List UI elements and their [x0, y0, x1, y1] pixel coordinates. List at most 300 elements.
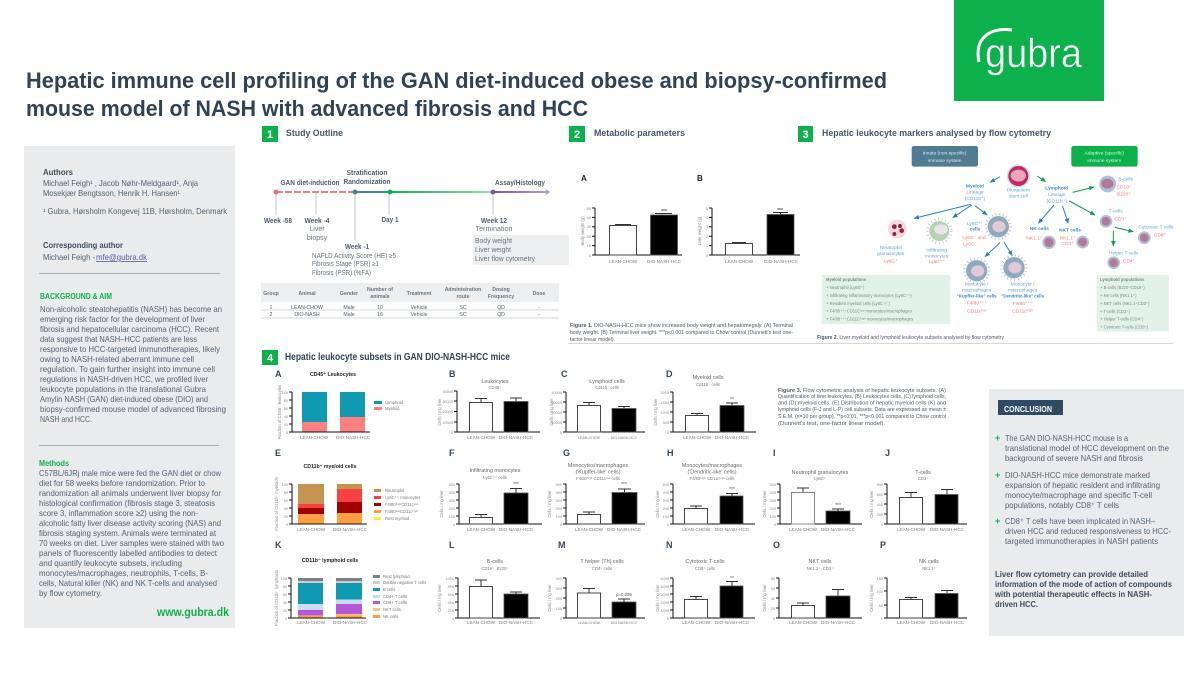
panel: authors, background and methods sidebar [24, 146, 235, 628]
termination readouts: Liver weight [475, 247, 511, 254]
chart: liver weight: DIO-NASH-HCC [764, 259, 799, 264]
chart G: Kupffer-like monocytes/macrophages: 200 [556, 507, 562, 511]
methods: cells, Natural killer (NK) and NK T-cells and analysed [39, 579, 217, 588]
chart A: CD45+ leukocytes stacked bars: Fraction of CD45⁺ leukocytes [277, 385, 282, 439]
chart A: CD45+ leukocytes stacked bars: Lymphoid [385, 400, 404, 405]
chart K: CD11b- lymphoid stacked bars: Double negative T cells [383, 580, 426, 585]
methods: and quantify leukocyte subsets, including [39, 559, 182, 568]
chart M: T helper cells: M [558, 540, 566, 550]
chart E: CD11b+ myeloid stacked bars: 80 [284, 491, 288, 495]
table: study groups: Dose [533, 291, 545, 297]
heading: section 1 study outline: Study Outline [286, 128, 343, 138]
chart M: T helper cells: Cells / mg liver [547, 584, 552, 612]
background and aim: data suggest that NASH–HCC patients are less [40, 335, 197, 344]
chart K: CD11b- lymphoid stacked bars: CD4+ T cells [383, 594, 407, 599]
chart H: dendritic-like monocytes/macrophages [655, 448, 755, 532]
chart B: leukocytes: B [449, 369, 456, 379]
conclusion statement [994, 570, 1172, 609]
chart G: Kupffer-like monocytes/macrophages: 500 [556, 483, 562, 487]
chart: body weight: 50 [587, 207, 591, 211]
chart C: lymphoid cells: Cells / mg liver [549, 398, 554, 426]
caption: figure 1: body weight. (B) Terminal liver weight. ***p<0.001 compared to Chow control (Dunnett's test one- [570, 330, 793, 336]
NKT cells: CD3⁺ [1062, 241, 1074, 247]
chart P: NK cells [869, 540, 967, 625]
resident macrophage: Ly6C⁻ [963, 242, 977, 248]
stem cell [1007, 164, 1031, 200]
chart: body weight: 40 [587, 216, 591, 220]
myeloid lineage label [965, 183, 986, 202]
NKT cells [1059, 228, 1089, 248]
stem cell: Pluripotent [1007, 187, 1031, 193]
cytotoxic T-cells [1138, 225, 1174, 244]
chart P: NK cells: 0 [881, 617, 883, 621]
chart O: NKT cells: 40 [771, 597, 775, 601]
chart: liver weight: 4 [706, 216, 708, 220]
chart D: myeloid cells: Cd11b⁺ cells [696, 382, 720, 387]
methods: diet for 58 weeks before randomization. Prior to [39, 479, 205, 488]
helper T-cells: Helper T cells [1109, 250, 1139, 256]
helper T-cells: CD4⁺ [1123, 258, 1136, 264]
chart F: infiltrating monocytes: *** [513, 482, 519, 488]
heading: section 2 metabolic parameters: 2 [574, 129, 580, 141]
title: mouse model of NASH with advanced fibrosis and HCC [26, 96, 588, 121]
table: study groups: Frequency [488, 294, 514, 300]
chart B: leukocytes: Leukocytes [481, 379, 509, 385]
logo: gubra [954, 0, 1104, 101]
stem cell: stem cell [1009, 194, 1028, 200]
myeloid lineage label: Lineage [966, 190, 984, 196]
B-cells: CD19⁺ [1117, 185, 1132, 191]
timeline: study outline: Fibrosis (PSR) (%FA) [312, 270, 371, 277]
conclusion point 1: The GAN DIO-NASH-HCC mouse is a [1005, 434, 1128, 443]
lymphoid lineage label [1045, 186, 1068, 204]
chart D: myeloid cells: 1000 [661, 411, 669, 415]
background and aim: biopsy-confirmed mouse model of advanced fibrosing [40, 405, 226, 414]
chart A: CD45+ leukocytes stacked bars: 0 [286, 431, 288, 435]
conclusion point 3 [995, 516, 1171, 546]
kupffer-like macrophage: F4/80⁺⁺⁺ [967, 301, 987, 307]
B-cells: B220⁺ [1117, 192, 1131, 198]
chart E: CD11b+ myeloid stacked bars: Neutrophil [385, 488, 404, 493]
lineage arrows [914, 176, 1133, 257]
chart F: infiltrating monocytes [439, 448, 542, 532]
chart J: T-cells: 800 [877, 483, 883, 487]
chart G: Kupffer-like monocytes/macrophages: 100 [556, 515, 562, 519]
chart F: infiltrating monocytes: 0 [453, 523, 455, 527]
background and aim: leukocyte populations in the translational Gubra [40, 385, 206, 394]
chart H: dendritic-like monocytes/macrophages: Cells / mg liver [655, 490, 660, 518]
lymphoid populations box: + NK cells (NK1.1⁺) [1100, 293, 1137, 298]
chart D: myeloid cells: 1500 [661, 401, 669, 405]
chart K: CD11b- lymphoid stacked bars: NK cells [383, 614, 398, 619]
chart P: NK cells: NK cells [919, 559, 939, 565]
authors [43, 168, 228, 216]
chart K: CD11b- lymphoid stacked bars: 60 [283, 593, 287, 597]
chart J: T-cells: DIO-NASH-HCC [930, 527, 965, 532]
chart O: NKT cells: 0 [773, 617, 775, 621]
chart M: T helper cells: 300 [556, 587, 562, 591]
chart L: B-cells: 600 [448, 593, 454, 597]
chart H: dendritic-like monocytes/macrophages: 0 [667, 523, 669, 527]
chart C: lymphoid cells: 40000 [551, 391, 562, 395]
chart M: T helper cells [547, 540, 645, 625]
chart D: myeloid cells: Myeloid cells [693, 375, 724, 381]
title [26, 68, 887, 121]
timeline: study outline: NAFLD Activity Score (HE) ≥5 [312, 253, 396, 260]
chart K: CD11b- lymphoid stacked bars: DIO-NASH-HCC [333, 620, 368, 625]
chart H: dendritic-like monocytes/macrophages: Monocytes/macrophages [682, 463, 742, 469]
table: study groups: Group [263, 291, 279, 297]
lymphoid lineage label: Lineage [1048, 192, 1066, 198]
chart N: cytotoxic T-cells: 4000 [661, 585, 669, 589]
conclusion point 3: + [995, 516, 1000, 526]
chart: liver weight: 2 [706, 235, 708, 239]
chart F: infiltrating monocytes: Ly6C⁺⁺ cells [483, 475, 507, 480]
chart P: NK cells: LEAN-CHOW [897, 620, 926, 625]
table: study groups: QD [497, 305, 505, 311]
chart J: T-cells: 0 [881, 523, 883, 527]
chart G: Kupffer-like monocytes/macrophages: F4/80ʰⁱᵍʰ CD11cˡᵒʷ cells [576, 475, 620, 481]
table: study groups: DIO-NASH [294, 312, 320, 318]
chart I: neutrophil granulocytes: 300 [770, 499, 776, 503]
resident macrophage: Ly6C⁺⁺ [967, 221, 984, 227]
conclusion point 3: CD8⁺ T cells have been implicated in NASH– [1005, 517, 1155, 526]
chart E: CD11b+ myeloid stacked bars: LEAN-CHOW [297, 527, 326, 532]
table: study groups: Gender [340, 291, 358, 297]
chart: body weight: *** [661, 209, 667, 215]
timeline: study outline: Stratification [346, 170, 388, 177]
conclusion point 1: background of severe NASH and fibrosis [1005, 454, 1143, 463]
chart M: T helper cells: DIO-NASH-HCC [611, 621, 638, 625]
neutrophil: Neutrophil [880, 245, 902, 251]
chart H: dendritic-like monocytes/macrophages: 400 [663, 491, 669, 495]
chart C: lymphoid cells: Cd11b⁻ cells [595, 385, 619, 390]
chart G: Kupffer-like monocytes/macrophages: 400 [556, 491, 562, 495]
kupffer-like macrophage: CD11cˡᵒʷ [967, 308, 987, 314]
table: study groups: - [538, 312, 540, 318]
chart A: CD45+ leukocytes stacked bars: 40 [284, 415, 288, 419]
table: study groups: Vehicle [411, 305, 427, 311]
dendritic-like macrophage: CD11cʰⁱᵍʰ [1012, 307, 1033, 314]
background and aim: responsive to HCC-targeted immunotherapies, likely [40, 345, 221, 354]
chart D: myeloid cells: 2000 [661, 391, 669, 395]
chart F: infiltrating monocytes: 200 [449, 507, 455, 511]
resident macrophage: cells [970, 227, 981, 233]
chart K: CD11b- lymphoid stacked bars: Fraction of CD11b⁻ lymphoids [274, 570, 279, 626]
chart D: myeloid cells: 500 [663, 421, 669, 425]
chart D: myeloid cells: Cells / mg liver [653, 398, 658, 426]
chart I: neutrophil granulocytes: LEAN-CHOW [789, 527, 818, 532]
table: study groups: Treatment [407, 291, 432, 297]
corresponding author [43, 241, 148, 262]
chart A: CD45+ leukocytes stacked bars: 60 [284, 407, 288, 411]
chart N: cytotoxic T-cells: 0 [667, 617, 669, 621]
chart I: neutrophil granulocytes: DIO-NASH-HCC [821, 527, 856, 532]
caption: figure 2: Figure 2. Liver myeloid and lymphoid leukocyte subsets analysed by flow cytometry [817, 335, 1004, 341]
caption: figure 3 [778, 388, 946, 427]
table: study groups: Vehicle [411, 312, 427, 318]
chart G: Kupffer-like monocytes/macrophages: 0 [560, 523, 562, 527]
chart F: infiltrating monocytes: LEAN-CHOW [467, 527, 496, 532]
chart F: infiltrating monocytes: 100 [449, 515, 455, 519]
chart O: NKT cells: NKT cells [809, 559, 832, 565]
chart N: cytotoxic T-cells: 2000 [661, 601, 669, 605]
caption: figure 3: Quantification of liver leukocytes, (B) Leukocytes cells, (C) lymphoid cells, [778, 394, 946, 400]
chart L: B-cells: DIO-NASH-HCC [499, 620, 534, 625]
timeline: study outline: biopsy [307, 235, 328, 242]
table: study groups: SC [459, 305, 467, 311]
chart O: NKT cells: LEAN-CHOW [789, 620, 818, 625]
chart K: CD11b- lymphoid stacked bars [274, 540, 426, 626]
lymphoid populations box: + T-cells (CD3⁺) [1100, 309, 1131, 314]
chart: body weight: 0 [589, 254, 591, 258]
chart I: neutrophil granulocytes: 400 [770, 491, 776, 495]
heading: section 4 hepatic leukocyte subsets: Hepatic leukocyte subsets in GAN DIO-NASH-HCC mice [285, 352, 510, 363]
chart L: B-cells: LEAN-CHOW [467, 620, 496, 625]
chart O: NKT cells: 20 [771, 607, 775, 611]
authors: Michael Feigh¹ , Jacob Nøhr-Meldgaard¹, Anja [43, 179, 198, 188]
chart O: NKT cells: 60 [771, 587, 775, 591]
chart L: B-cells: B-cells [487, 559, 503, 565]
chart A: CD45+ leukocytes stacked bars: A [275, 369, 282, 379]
caption: figure 3: and (D) myeloid cells. (E) Distribution of hepatic myeloid cells (K) and [778, 400, 946, 406]
innate immune system box: Innate (non-specific) [923, 150, 967, 156]
chart B: leukocytes: 20000 [442, 410, 453, 414]
chart J: T-cells: LEAN-CHOW [897, 527, 926, 532]
chart L: B-cells: 800 [448, 585, 454, 589]
chart B: leukocytes: 40000 [442, 390, 453, 394]
chart I: neutrophil granulocytes: 0 [774, 523, 776, 527]
kupffer-like macrophage: "Kupffer-like" cells [957, 294, 997, 300]
chart B: leukocytes [437, 369, 540, 440]
cytotoxic T-cells: CD8⁺ [1154, 232, 1167, 238]
caption: figure 1: Figure 1. DIO-NASH-HCC mice show increased body weight and hepatomegaly. (A) Terminal [570, 323, 793, 329]
methods: histological confirmation (fibrosis stage 3, steatosis [39, 499, 215, 508]
methods: randomization all animals underwent liver biopsy for [39, 489, 221, 498]
chart B: leukocytes: 10000 [442, 421, 453, 425]
chart F: infiltrating monocytes: Infiltrating monocytes [470, 468, 521, 474]
infiltrating monocyte: Ly6C⁺⁺ [929, 259, 945, 265]
heading: section 1 study outline: 1 [267, 129, 273, 141]
myeloid lineage label: Myeloid [966, 183, 984, 189]
chart M: T helper cells: T helper (Th) cells [580, 559, 624, 565]
chart J: T-cells [869, 448, 967, 532]
background and aim: BACKGROUND & AIM [40, 292, 112, 301]
table: study groups: animals [370, 294, 390, 300]
chart: liver weight: Liver weight (g) [697, 216, 702, 245]
logo: gubra: gubra [985, 30, 1082, 76]
innate immune system box [912, 146, 978, 167]
chart B: leukocytes: Cells / mg liver [437, 398, 442, 426]
table: study groups: 1 [270, 305, 273, 311]
conclusion point 1: translational model of HCC development on the [1005, 444, 1169, 453]
chart I: neutrophil granulocytes: Cells / mg liver [762, 490, 767, 518]
lymphoid populations box: + Cytotoxic T-cells (CD8⁺) [1100, 325, 1149, 330]
chart J: T-cells: 200 [877, 513, 883, 517]
myeloid lineage label: (CD11b⁺) [965, 196, 986, 202]
adaptive immune system box: immune system [1087, 158, 1121, 164]
chart L: B-cells: CD19⁺, B220⁺ [481, 566, 509, 571]
chart K: CD11b- lymphoid stacked bars: K [275, 540, 282, 550]
chart L: B-cells: L [449, 540, 455, 550]
chart K: CD11b- lymphoid stacked bars: Rest lymphoid [383, 574, 410, 579]
chart E: CD11b+ myeloid stacked bars: DIO-NASH-HCC [333, 527, 368, 532]
chart N: cytotoxic T-cells: ** [730, 576, 734, 582]
table: study groups: Male [343, 305, 355, 311]
chart O: NKT cells: O [773, 540, 780, 550]
caption: figure 1: factor linear model). [570, 337, 615, 343]
chart: body weight: Body weight (g) [580, 216, 585, 246]
chart C: lymphoid cells: LEAN-CHOW [578, 436, 601, 440]
chart O: NKT cells: Cells / mg liver [762, 584, 767, 612]
chart L: B-cells: 0 [452, 617, 454, 621]
adaptive immune system box: Adaptive (specific) [1085, 150, 1124, 156]
chart I: neutrophil granulocytes: I [773, 448, 776, 458]
lymphoid populations box: + Helper T-cells (CD4⁺) [1100, 317, 1144, 322]
table: study groups: Administration [445, 287, 481, 293]
chart K: CD11b- lymphoid stacked bars: CD11b⁻ lymphoid cells [302, 558, 358, 564]
chart A: CD45+ leukocytes stacked bars: LEAN-CHOW [300, 435, 329, 440]
methods: Methods [39, 459, 69, 468]
chart: liver weight: B [697, 174, 703, 183]
chart D: myeloid cells [653, 369, 756, 440]
chart C: lymphoid cells: 10000 [551, 421, 562, 425]
chart P: NK cells: 50 [879, 604, 883, 608]
table: study groups: SC [459, 312, 467, 318]
chart M: T helper cells: 400 [556, 577, 562, 581]
infiltrating monocyte [925, 219, 951, 265]
table: study groups: Dosing [492, 287, 510, 293]
chart H: dendritic-like monocytes/macrophages: H [667, 448, 674, 458]
chart H: dendritic-like monocytes/macrophages: ('Dendritic-like' cells) [687, 470, 737, 476]
heading: section 1 study outline [262, 126, 343, 142]
chart E: CD11b+ myeloid stacked bars: F4/80ˡᵒʷCD11cʰⁱᵍʰ [385, 508, 418, 514]
chart I: neutrophil granulocytes: 100 [770, 515, 776, 519]
T-cells: T-cells [1109, 209, 1123, 215]
chart B: leukocytes: LEAN-CHOW [467, 435, 496, 440]
chart N: cytotoxic T-cells: Cytotoxic T-cells [685, 559, 725, 565]
chart N: cytotoxic T-cells: DIO-NASH-HCC [715, 620, 750, 625]
myeloid populations box [822, 275, 950, 324]
background and aim: fibrosis and hepatocellular carcinoma (HCC). Recent [40, 325, 220, 334]
T-cells: CD3⁺ [1115, 217, 1127, 223]
methods: fibrosis staging system. Animals were terminated at [39, 529, 217, 538]
termination readouts: Liver flow cytometry [475, 256, 535, 263]
chart I: neutrophil granulocytes: Ly6G⁺ [814, 476, 826, 481]
dendritic-like macrophage: Monocyte / [1011, 281, 1035, 287]
chart N: cytotoxic T-cells: CD8⁺ cells [695, 566, 715, 571]
table: study groups: LEAN-CHOW [291, 305, 323, 311]
timeline: study outline: Week -4 [304, 218, 330, 225]
chart L: B-cells: 200 [448, 609, 454, 613]
chart A: CD45+ leukocytes stacked bars: 100 [282, 391, 288, 395]
chart C: lymphoid cells: 30000 [551, 401, 562, 405]
chart J: T-cells: Cells / mg liver [869, 490, 874, 518]
table: study groups: Male [343, 312, 355, 318]
chart G: Kupffer-like monocytes/macrophages: G [563, 448, 570, 458]
methods: 70 weeks on diet. Liver samples were stained with two [39, 539, 224, 548]
chart D: myeloid cells: ** [730, 397, 734, 403]
heading: section 2 metabolic parameters [569, 126, 685, 142]
timeline: study outline: Assay/Histology [495, 180, 545, 187]
caption: figure 3: (Dunnett's test, one-factor linear model). [778, 421, 885, 427]
conclusion point 3: driven HCC and reduced responsiveness to HCC- [1005, 527, 1171, 536]
resident macrophage [962, 214, 1011, 248]
chart N: cytotoxic T-cells: Cells / mg liver [655, 584, 660, 612]
chart P: NK cells: 150 [877, 577, 883, 581]
heading: section 3 leukocyte markers: 3 [802, 129, 809, 141]
chart I: neutrophil granulocytes: *** [835, 503, 841, 509]
chart F: infiltrating monocytes: F [449, 448, 455, 458]
chart K: CD11b- lymphoid stacked bars: LEAN-CHOW [297, 620, 326, 625]
chart H: dendritic-like monocytes/macrophages: 300 [663, 499, 669, 503]
NKT cells: NK1.1⁺ [1060, 235, 1076, 241]
chart F: infiltrating monocytes: Cells / mg liver [439, 490, 444, 518]
timeline: study outline: Liver [309, 226, 325, 233]
chart B: leukocytes: 0 [451, 431, 453, 435]
dendritic-like macrophage: F4/80⁺⁺⁺ [1013, 301, 1033, 307]
chart H: dendritic-like monocytes/macrophages: DIO-NASH-HCC [715, 527, 750, 532]
chart M: T helper cells: 100 [556, 607, 562, 611]
lymphoid lineage label: (CD11b⁻) [1046, 198, 1067, 204]
chart A: CD45+ leukocytes stacked bars: 80 [284, 399, 288, 403]
myeloid populations box: + Resident myeloid cells (Ly6C⁺/⁻) [826, 301, 891, 306]
conclusion statement: Liver flow cytometry can provide detailed [995, 570, 1148, 579]
timeline: study outline: Week -1 [345, 244, 369, 251]
chart: body weight: A [581, 174, 587, 183]
methods: C57BL/6JRj male mice were fed the GAN diet or chow [39, 469, 221, 478]
termination readouts [473, 235, 569, 265]
cytotoxic T-cells: Cytotoxic T cells [1139, 225, 1174, 231]
lymphoid populations box: + NKT cells (NK1.1⁺CD3⁺) [1100, 301, 1150, 306]
chart E: CD11b+ myeloid stacked bars: Fraction of CD11b⁺ myeloids [274, 477, 279, 531]
chart N: cytotoxic T-cells: LEAN-CHOW [682, 620, 711, 625]
methods: monocytes/macrophages, neutrophils, T-cells, B- [39, 569, 208, 578]
chart H: dendritic-like monocytes/macrophages: 100 [663, 515, 669, 519]
chart G: Kupffer-like monocytes/macrophages: ('Kupffer-like' cells) [575, 470, 621, 476]
chart K: CD11b- lymphoid stacked bars: NKT cells [383, 607, 401, 612]
caption: figure 3: S.E.M. (n=10 per group). **p<0.01, ***p<0.001 compared to Chow control [778, 414, 946, 420]
conclusion badge [998, 400, 1063, 415]
chart A: CD45+ leukocytes stacked bars: CD45⁺ Leukocytes [310, 372, 356, 378]
chart I: neutrophil granulocytes: 500 [770, 483, 776, 487]
neutrophil [877, 220, 907, 264]
chart A: CD45+ leukocytes stacked bars: 20 [284, 423, 288, 427]
timeline: study outline: GAN diet-induction [280, 180, 340, 187]
chart M: T helper cells: p=0.086 [616, 592, 633, 597]
infiltrating monocyte: monocytes [925, 253, 949, 259]
chart F: infiltrating monocytes: 300 [449, 499, 455, 503]
chart L: B-cells: 400 [448, 601, 454, 605]
dendritic-like macrophage: macrophages [1008, 287, 1038, 293]
background and aim: regulations in NASH-driven HCC, we profiled liver [40, 375, 208, 384]
methods: panels of fluorescently labelled antibodies to detect [39, 549, 218, 558]
chart E: CD11b+ myeloid stacked bars: 0 [286, 523, 288, 527]
chart B: leukocytes: DIO-NASH-HCC [499, 435, 534, 440]
chart E: CD11b+ myeloid stacked bars: 40 [284, 507, 288, 511]
methods [39, 459, 224, 598]
resident macrophage: Ly6G⁻ and [962, 235, 986, 241]
chart E: CD11b+ myeloid stacked bars: 20 [284, 515, 288, 519]
chart M: T helper cells: CD4⁺ cells [592, 566, 612, 571]
methods: score 3, inflammation score ≥2) using the non- [39, 509, 198, 518]
heading: section 3 leukocyte markers [798, 126, 1051, 142]
dendritic-like macrophage: "Dendritic-like" cells [1001, 294, 1044, 300]
chart: liver weight: *** [777, 208, 783, 214]
chart H: dendritic-like monocytes/macrophages: F4/80ʰⁱᵍʰ CD11cʰⁱᵍʰ cells [690, 475, 734, 481]
timeline: study outline: Fibrosis Stage (PSR) ≥1 [312, 261, 379, 268]
chart J: T-cells: CD3⁺ [918, 476, 928, 481]
